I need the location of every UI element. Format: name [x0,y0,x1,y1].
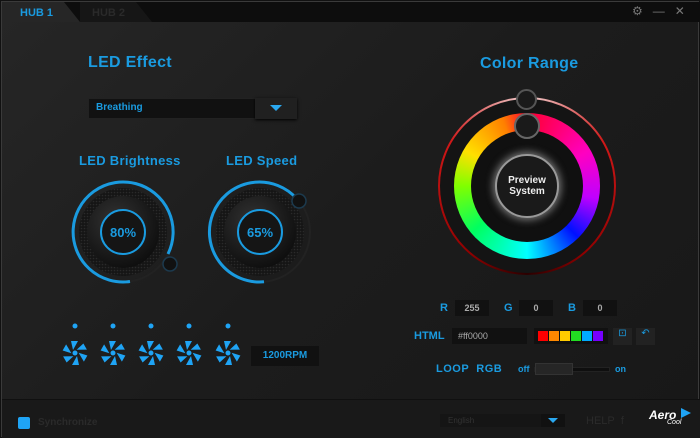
RGB inputs: 0 [597,303,602,313]
HTML row: HTML [414,330,445,342]
dropdown: Breathing [88,98,297,119]
language dropdown [440,414,565,427]
LOOP RGB toggle: LOOP RGB [436,363,502,375]
RGB inputs: G [504,302,513,314]
heading: LED Effect: LED Effect [88,54,172,71]
HTML row [414,328,655,345]
tab: HUB 1 [2,2,80,22]
RGB inputs [440,300,617,316]
dropdown: Breathing: Breathing [96,102,143,113]
rpm box [251,346,319,366]
knob: brightness 80%: 80% [110,225,136,240]
LOOP RGB toggle: on [615,364,626,374]
knob: speed 65%: 65% [247,225,273,240]
RGB inputs: 0 [533,303,538,313]
tab: HUB 2 [80,2,152,22]
preview system button: Preview [508,175,546,186]
HTML row: #ff0000 [458,331,488,341]
LOOP RGB toggle [436,363,626,375]
bottom bar [2,399,700,438]
window controls: ⚙ — ✕ [632,4,685,18]
fans [63,324,240,365]
tab: HUB 1: HUB 1 [20,7,53,19]
tab bar [2,2,700,22]
heading: Color Range: Color Range [480,55,578,72]
synchronize checkbox [18,417,30,429]
knob: brightness 80% [73,182,177,282]
help: HELP f [586,415,624,427]
HTML row: ↶ [641,328,650,339]
language dropdown: English [448,416,474,425]
preview system button [495,154,559,218]
heading: LED Brightness: LED Brightness [79,153,181,168]
LOOP RGB toggle: off [518,364,530,374]
RGB inputs: B [568,302,576,314]
rpm box: 1200RPM [263,350,307,361]
heading: LED Speed: LED Speed [226,153,297,168]
logo: Aero [649,408,676,422]
bottom bar: Synchronize [38,417,97,428]
RGB inputs: 255 [464,303,480,313]
knob: speed 65% [209,182,310,282]
tab: HUB 2: HUB 2 [92,7,125,19]
color wheel [438,89,616,275]
swatches [534,328,608,344]
preview system button: System [509,186,545,197]
HTML row: ⊡ [618,328,627,339]
logo: Cool [667,419,681,426]
logo [648,408,691,426]
RGB inputs: R [440,302,448,314]
